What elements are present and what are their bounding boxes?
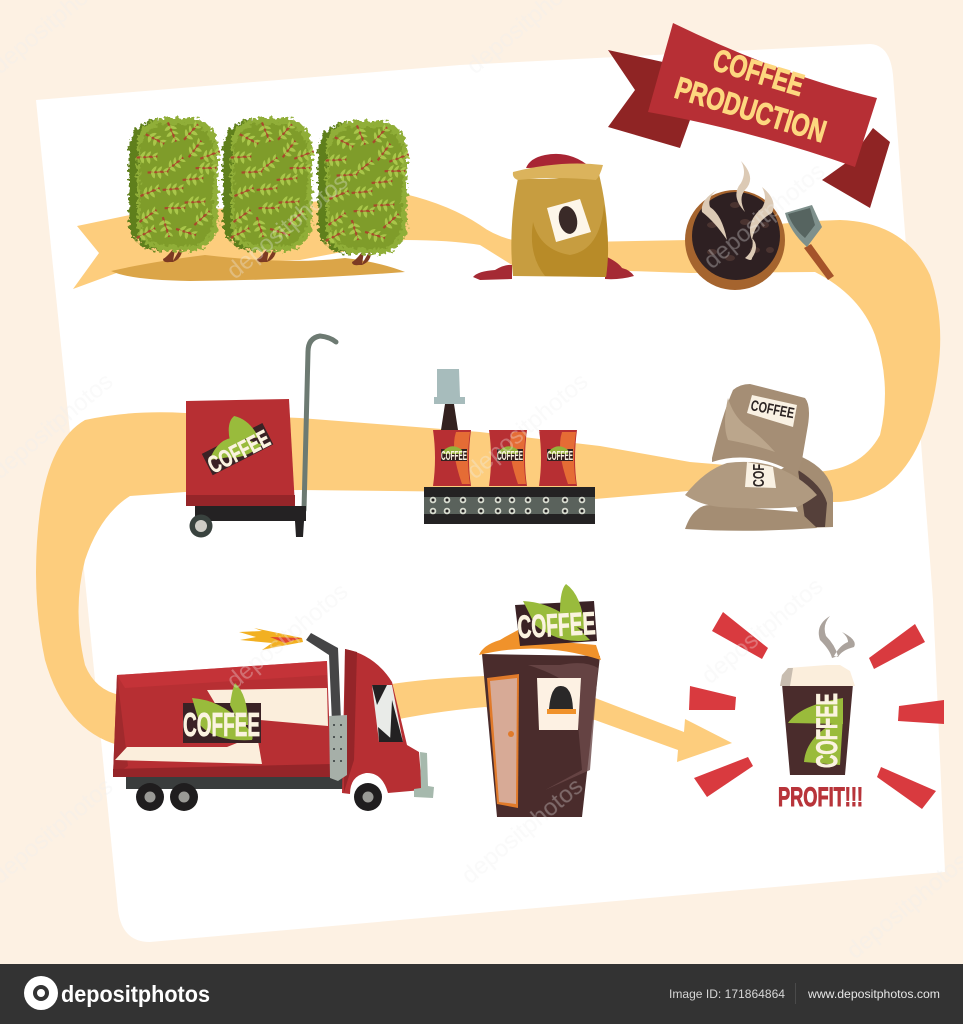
door knob bbox=[508, 731, 514, 737]
cup lid bbox=[780, 665, 855, 686]
top label text: COFFEE bbox=[749, 397, 796, 422]
flame bbox=[239, 628, 303, 650]
shop door bbox=[487, 674, 519, 808]
packing line: COFFEE bbox=[441, 448, 467, 463]
bag label 3 bbox=[547, 446, 573, 463]
sign text: COFFEE bbox=[516, 605, 596, 645]
top sack highlight bbox=[725, 398, 775, 452]
ribbon end with arrow to cup bbox=[385, 676, 732, 762]
conveyor rollers bbox=[431, 498, 584, 513]
red box bbox=[186, 399, 295, 506]
bean icon bbox=[556, 204, 580, 236]
banner left tail bbox=[608, 50, 690, 148]
middle label text: COF bbox=[751, 464, 768, 487]
bush 3 bbox=[318, 121, 411, 265]
sack body bbox=[511, 170, 608, 277]
shop window bbox=[537, 678, 581, 730]
cab bbox=[342, 649, 422, 794]
box label bbox=[193, 406, 276, 480]
bag 1 bbox=[433, 430, 471, 486]
top label bbox=[747, 395, 797, 427]
ray upper right bbox=[869, 624, 925, 669]
sign plate bbox=[515, 601, 597, 646]
ray left bbox=[689, 686, 736, 710]
sign leaves bbox=[523, 584, 590, 641]
footer divider bbox=[795, 983, 796, 1004]
bowl rim bbox=[685, 190, 785, 290]
bush 1 bbox=[129, 118, 222, 262]
sack of coffee cherries bbox=[473, 154, 634, 280]
trailer sign bbox=[183, 683, 261, 743]
cart wheel bbox=[190, 514, 212, 538]
conveyor belt bbox=[424, 487, 595, 524]
cup steam bbox=[819, 616, 855, 658]
middle label bbox=[745, 462, 776, 488]
footer logo icon bbox=[24, 976, 58, 1010]
coffee bushes bbox=[111, 118, 411, 281]
bag 2 bbox=[489, 430, 527, 486]
bumper bbox=[414, 752, 434, 798]
hand cart with box bbox=[186, 336, 336, 538]
sign plate bbox=[183, 703, 261, 743]
sacks of coffee bbox=[685, 384, 833, 531]
winding path ribbon bbox=[36, 194, 940, 745]
rear sack bbox=[780, 457, 833, 528]
wheel 1 bbox=[136, 783, 164, 811]
exhaust pipe bbox=[306, 633, 342, 745]
steam bbox=[702, 161, 774, 260]
bag label 2 bbox=[497, 446, 523, 463]
image id: Image ID: 171864864 bbox=[669, 987, 785, 1001]
coffee shop bbox=[479, 584, 601, 817]
bean texture bbox=[707, 202, 774, 261]
dispenser bbox=[434, 369, 465, 404]
footer brand: depositphotos bbox=[61, 981, 210, 1007]
ground under bushes bbox=[111, 255, 405, 281]
delivery truck bbox=[113, 628, 434, 811]
beans bbox=[692, 192, 780, 280]
packing line: COFFEE bbox=[547, 448, 573, 463]
hatch sill bbox=[547, 709, 576, 714]
title text line 2: PRODUCTION bbox=[671, 70, 830, 149]
label plate bbox=[202, 423, 273, 475]
scoop bbox=[785, 205, 834, 280]
ray lower right bbox=[877, 767, 936, 809]
scoop head bbox=[785, 205, 822, 247]
title text line 1: COFFEE bbox=[709, 42, 808, 103]
watermarks: depositphotos bbox=[697, 573, 828, 690]
banner main bbox=[648, 23, 877, 167]
watermarks: depositphotos bbox=[462, 368, 593, 485]
ray upper left bbox=[712, 612, 768, 659]
ray lower left bbox=[694, 757, 753, 797]
packing line bbox=[424, 369, 595, 524]
bag label 1 bbox=[441, 446, 467, 463]
exhaust guard bbox=[329, 715, 347, 781]
profit burst rays bbox=[689, 612, 944, 809]
cart base bbox=[195, 506, 306, 537]
scoop handle bbox=[804, 244, 834, 280]
watermarks: depositphotos bbox=[457, 773, 588, 890]
sign leaves bbox=[192, 683, 253, 740]
cup text: COFFEE bbox=[811, 693, 844, 768]
coffee stream bbox=[441, 404, 458, 430]
footer bar bbox=[0, 964, 963, 1024]
cart pole bbox=[304, 336, 336, 510]
label leaves bbox=[197, 411, 263, 471]
bowl of roasted beans bbox=[685, 161, 834, 290]
sack rim bbox=[513, 164, 603, 180]
middle sack bbox=[685, 462, 817, 508]
cup body bbox=[782, 684, 853, 775]
trailer bbox=[113, 661, 331, 776]
coffee cup bbox=[778, 616, 863, 812]
trailer stripe lower bbox=[115, 735, 262, 764]
profit text: PROFIT!!! bbox=[778, 782, 863, 812]
bean label bbox=[547, 199, 591, 242]
shop sign bbox=[515, 584, 597, 646]
chassis bbox=[126, 777, 348, 789]
cherries on top bbox=[526, 154, 590, 168]
bottom sack bbox=[685, 505, 817, 531]
bag 3 bbox=[539, 430, 577, 486]
website: www.depositphotos.com bbox=[807, 987, 940, 1001]
watermarks: depositphotos bbox=[222, 168, 353, 285]
title banner bbox=[608, 23, 890, 208]
label text: COFFEE bbox=[204, 425, 275, 479]
wheel 2 bbox=[170, 783, 198, 811]
footer background bbox=[0, 964, 963, 1024]
shop roof bbox=[479, 630, 601, 660]
watermarks: depositphotos bbox=[699, 158, 830, 275]
packing line: COFFEE bbox=[497, 448, 523, 463]
sack shading bbox=[532, 205, 608, 277]
cup leaves bbox=[788, 698, 843, 765]
spilled cherries bbox=[473, 256, 634, 280]
ray right bbox=[898, 700, 944, 724]
service hatch bbox=[549, 686, 573, 709]
banner right tail bbox=[822, 128, 890, 208]
shop body bbox=[482, 654, 600, 817]
trailer stripe upper bbox=[207, 688, 328, 726]
bush 2 bbox=[223, 118, 316, 262]
watermarks: depositphotos bbox=[222, 578, 353, 695]
sign text: COFFEE bbox=[183, 706, 260, 743]
top sack bbox=[712, 384, 809, 476]
wheel 3 bbox=[354, 783, 382, 811]
cab window bbox=[372, 685, 403, 742]
